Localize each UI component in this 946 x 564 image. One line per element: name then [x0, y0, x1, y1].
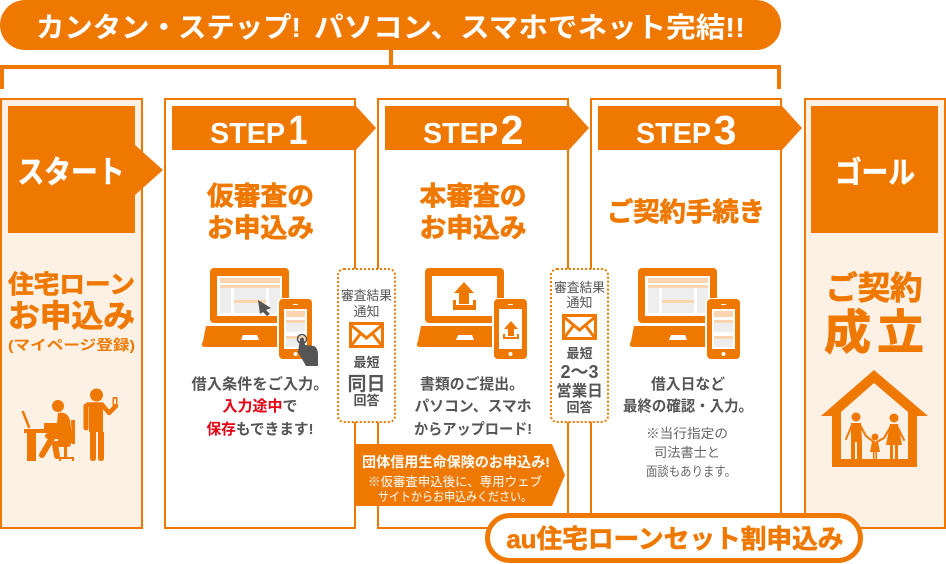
callout: result notice 2-3 business days: 審査結果 — [554, 280, 605, 295]
callout: result notice 2-3 business days: 営業日 — [556, 381, 603, 400]
start heading: スタート — [18, 155, 124, 190]
icon: laptop and phone with form — [630, 268, 741, 361]
step 2 description: 書類のご提出。 — [420, 375, 524, 393]
step 3 description: 最終の確認・入力。 — [623, 397, 753, 415]
callout: result notice same day: 通知 — [353, 304, 380, 319]
step 3 header — [598, 106, 802, 153]
step 2 title — [420, 181, 526, 243]
callout: result notice 2-3 business days: 最短 — [566, 346, 593, 361]
step 2 title: お申込み — [420, 213, 526, 243]
callout: result notice same day: 同日 — [347, 374, 386, 395]
arrow banner: group life insurance: ※仮審査申込後に、専用ウェブ — [368, 474, 542, 489]
callout: result notice 2-3 business days — [551, 269, 608, 422]
callout: result notice 2-3 business days: 通知 — [566, 295, 593, 310]
goal heading — [811, 106, 938, 233]
arrow banner: group life insurance: サイトからお申込みください。 — [378, 490, 532, 504]
step 1 description: 入力途中で — [222, 398, 298, 415]
title banner — [0, 0, 781, 50]
callout: result notice 2-3 business days: 2〜3 — [560, 362, 599, 382]
icon: envelope — [350, 324, 382, 346]
start heading — [8, 106, 163, 233]
title banner: カンタン・ステップ! — [36, 12, 301, 43]
step 1 description — [192, 375, 328, 438]
callout: result notice 2-3 business days: 回答 — [566, 400, 593, 415]
step 2 title: 本審査の — [420, 181, 526, 211]
step 2 description: パソコン、スマホ — [414, 398, 532, 415]
icon: laptop and phone with upload — [417, 268, 528, 361]
panel: start — [1, 99, 163, 528]
step 3 note: ※当行指定の — [646, 426, 728, 441]
bracket connector — [2, 48, 779, 89]
goal text: ご契約 — [826, 270, 922, 306]
title banner: パソコン、スマホでネット完結!! — [314, 12, 745, 43]
step 3 title: ご契約手続き — [607, 197, 765, 227]
step 1 title: お申込み — [207, 213, 314, 243]
callout: result notice same day: 審査結果 — [341, 288, 392, 303]
step 3 description — [623, 376, 753, 415]
icon: house with family — [821, 370, 928, 467]
pill: au set discount — [488, 516, 860, 560]
callout: result notice same day — [338, 269, 395, 422]
step 1 description: 借入条件をご入力。 — [192, 375, 328, 393]
start text — [8, 271, 135, 353]
step 3 note — [646, 426, 736, 479]
goal heading: ゴール — [835, 156, 915, 190]
step 1 title: 仮審査の — [207, 181, 314, 211]
arrow banner: group life insurance: 団体信用生命保険のお申込み! — [362, 454, 550, 470]
arrow banner: group life insurance — [355, 444, 565, 506]
icon: laptop and phone with form — [202, 268, 318, 366]
panel: step 2 — [378, 99, 589, 528]
step 1 header: 1 — [288, 107, 308, 153]
panel: goal — [805, 99, 945, 528]
step 3 header: STEP — [636, 118, 711, 150]
start text: お申込み — [8, 299, 135, 334]
panel: step 1 — [165, 99, 376, 528]
goal text: 成立 — [824, 306, 924, 359]
step 2 description — [414, 375, 532, 438]
step 3 note: 面談もあります。 — [646, 464, 736, 479]
step 2 description: からアップロード! — [414, 421, 532, 438]
icon: envelope — [564, 316, 596, 338]
goal text — [824, 270, 924, 359]
step 2 header — [385, 106, 589, 153]
step 3 header: 3 — [714, 107, 736, 153]
step 2 header: STEP — [423, 118, 498, 150]
callout: result notice same day: 最短 — [353, 355, 380, 370]
step 3 note: 司法書士と — [654, 445, 720, 460]
pill: au set discount: au住宅ローンセット割申込み — [506, 524, 844, 554]
step 1 title — [207, 181, 314, 243]
step 1 header: STEP — [210, 118, 285, 150]
step 3 description: 借入日など — [651, 376, 725, 393]
icon: people with laptop and phone — [23, 388, 118, 461]
start text: (マイページ登録) — [8, 337, 135, 353]
panel: step 3 — [591, 99, 802, 528]
step 1 description: 保存もできます! — [206, 420, 314, 438]
callout: result notice same day: 回答 — [353, 393, 380, 408]
step 2 header: 2 — [501, 107, 523, 153]
step 1 header — [172, 106, 376, 153]
start text: 住宅ローン — [8, 271, 135, 299]
